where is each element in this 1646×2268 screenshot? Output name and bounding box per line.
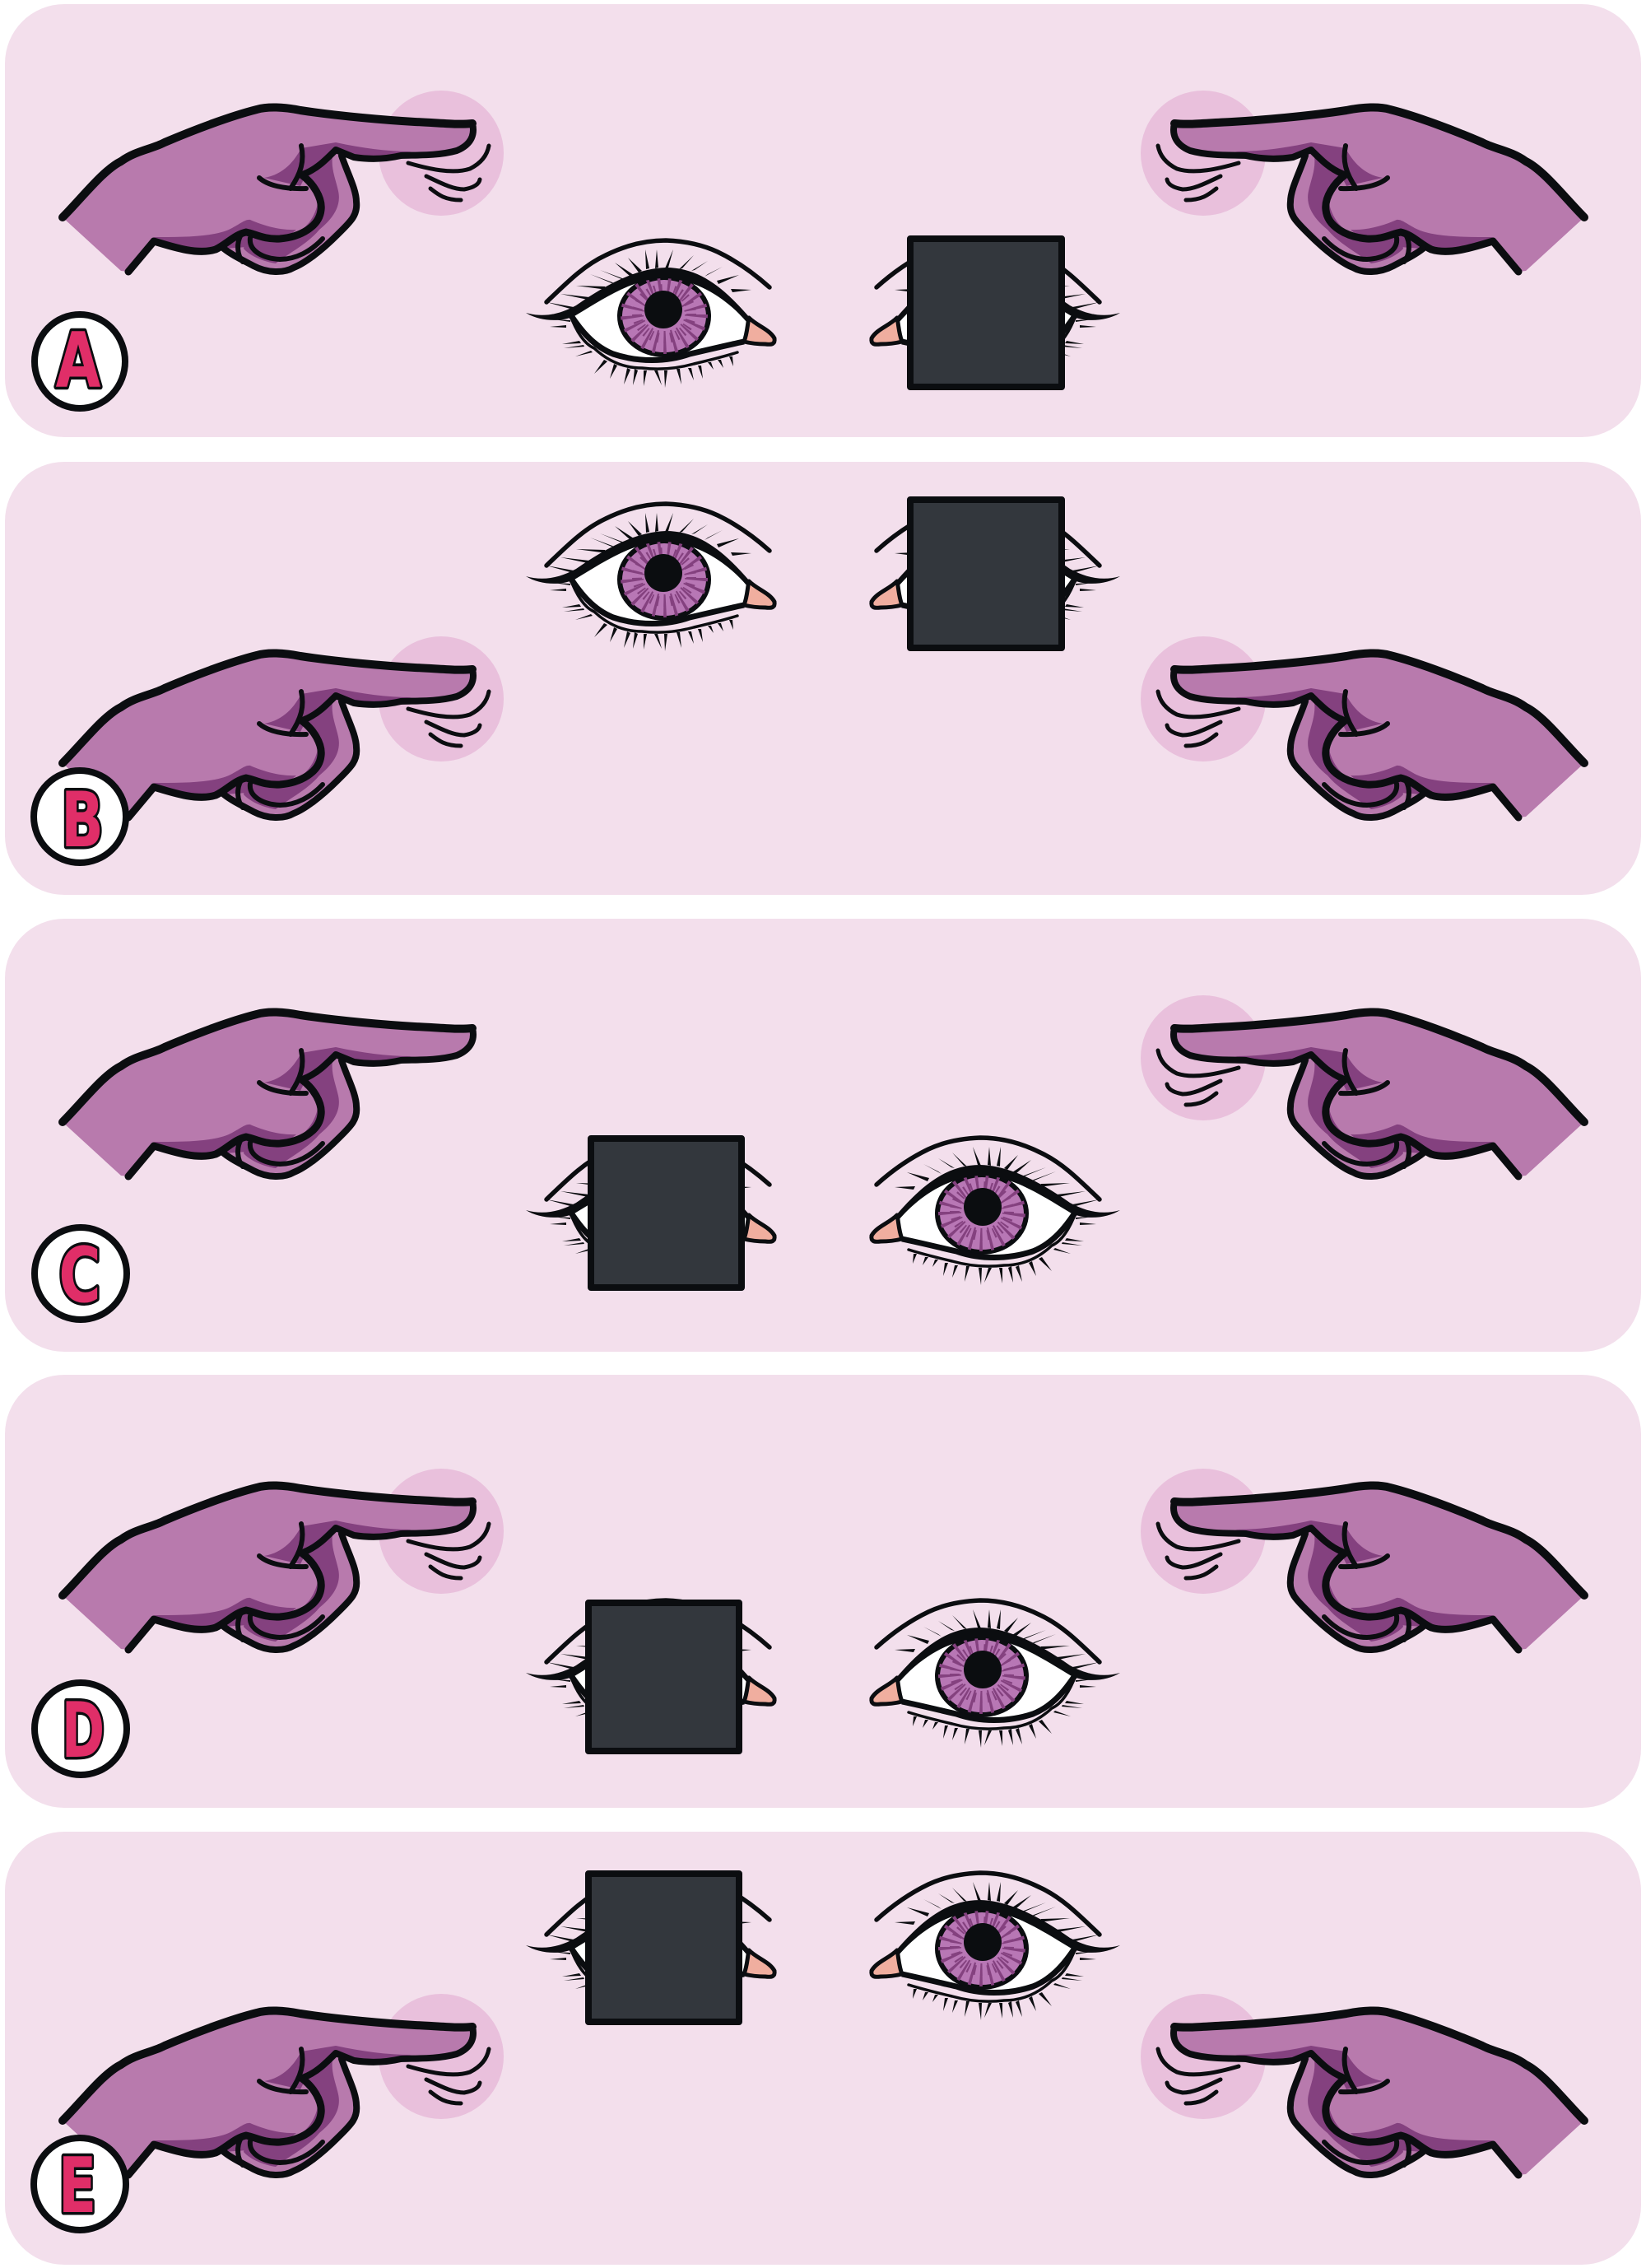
right hand E: [1174, 2010, 1584, 2175]
left pressure circle B: [379, 636, 504, 761]
left motion lines D: [408, 1524, 489, 1578]
right eye C: [872, 1138, 1120, 1285]
right pressure circle E: [1141, 1994, 1266, 2119]
badge A: [35, 314, 125, 408]
right hand A: [1174, 107, 1584, 272]
badge A: A: [56, 316, 100, 406]
right eye E: [872, 1873, 1120, 2020]
left hand E: [63, 2010, 473, 2175]
right eye A: [872, 240, 1120, 388]
panel B: [5, 462, 1641, 895]
occluder square C: [591, 1139, 742, 1288]
panel A background: [5, 4, 1641, 437]
right motion lines B: [1158, 692, 1239, 746]
right eye B: [872, 504, 1120, 651]
occluder square A: [910, 239, 1062, 387]
right hand B: [1174, 653, 1584, 817]
right pressure circle A: [1141, 91, 1266, 216]
left motion lines A: [408, 146, 489, 200]
left motion lines E: [408, 2049, 489, 2103]
left hand A: [63, 107, 473, 272]
right motion lines A: [1158, 146, 1239, 200]
panel D: [5, 1375, 1641, 1808]
right pressure circle B: [1141, 636, 1266, 761]
left hand B: [63, 653, 473, 817]
right motion lines D: [1158, 1524, 1239, 1578]
left pressure circle D: [379, 1469, 504, 1594]
right motion lines C: [1158, 1050, 1239, 1105]
left eye A: [526, 240, 774, 388]
occluder square D: [588, 1603, 739, 1751]
panel C background: [5, 919, 1641, 1352]
occluder square E: [588, 1874, 739, 2022]
badge B: B: [61, 775, 104, 865]
badge D: [35, 1683, 127, 1775]
badge C: C: [58, 1232, 101, 1320]
panel E: [5, 1832, 1641, 2265]
badge E: [34, 2138, 126, 2231]
right pressure circle D: [1141, 1469, 1266, 1594]
right eye D: [872, 1600, 1120, 1748]
panel A: [5, 4, 1641, 437]
panel C: [5, 919, 1641, 1352]
panel B background: [5, 462, 1641, 895]
left motion lines B: [408, 692, 489, 746]
right motion lines E: [1158, 2049, 1239, 2103]
occluder square B: [910, 500, 1062, 648]
left eye E: [526, 1873, 774, 2020]
left eye C: [526, 1138, 774, 1285]
right pressure circle C: [1141, 995, 1266, 1120]
left hand D: [63, 1485, 473, 1650]
left pressure circle A: [379, 91, 504, 216]
left pressure circle E: [379, 1994, 504, 2119]
badge B: [34, 771, 126, 865]
panel D background: [5, 1375, 1641, 1808]
badge C: [35, 1227, 127, 1320]
left hand C: [63, 1012, 473, 1176]
badge D: D: [62, 1685, 105, 1775]
badge E: E: [58, 2141, 96, 2231]
panel E background: [5, 1832, 1641, 2265]
left eye D: [526, 1600, 774, 1748]
left eye B: [526, 504, 774, 651]
right hand D: [1174, 1485, 1584, 1650]
right hand C: [1174, 1012, 1584, 1176]
